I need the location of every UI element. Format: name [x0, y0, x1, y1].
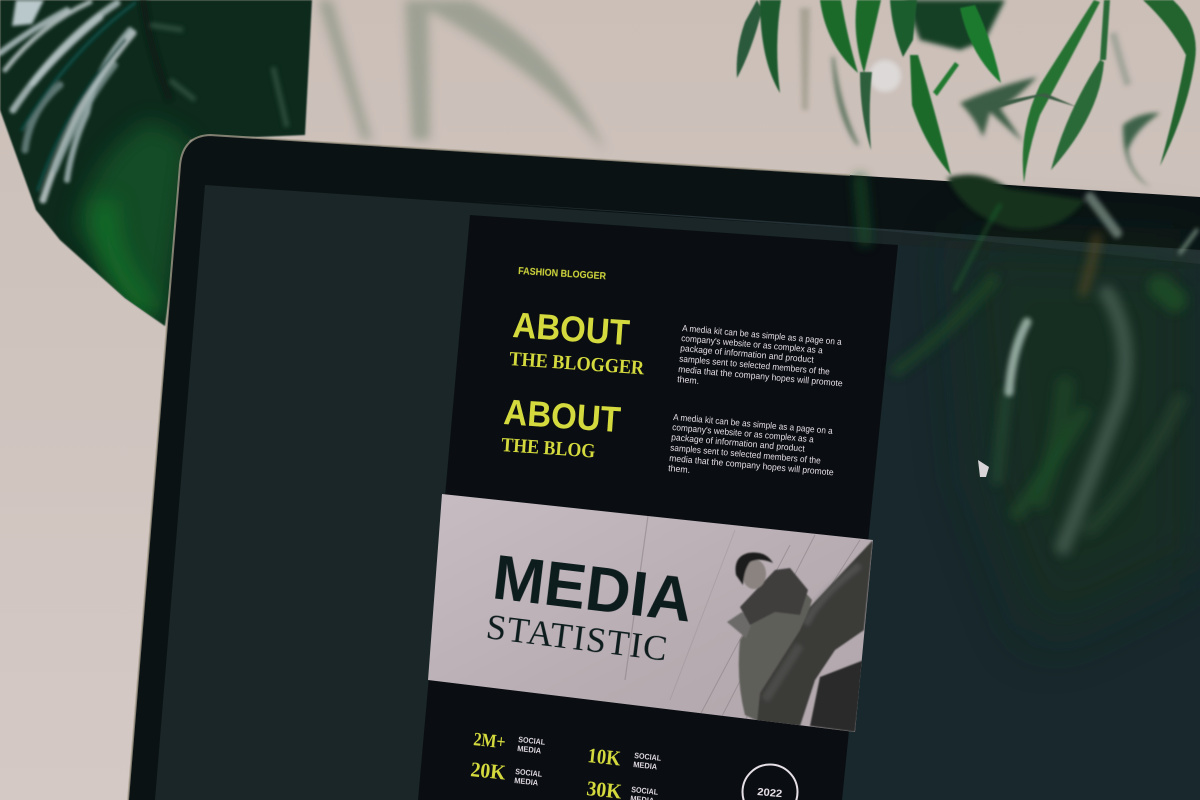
laptop screen	[155, 185, 1200, 800]
paragraph: about the blogger: A media kit can be as simple as a page on a	[682, 323, 842, 347]
stat: 30K: SOCIAL	[631, 785, 659, 797]
screen top band	[470, 201, 1200, 264]
dark green haze	[960, 240, 1200, 640]
paragraph: about the blog: company's website or as complex as a	[672, 422, 814, 444]
banner photo: media statistic	[428, 494, 873, 732]
paragraph: about the blog: media that the company hopes will promote	[669, 453, 834, 477]
laptop lid bezel	[128, 135, 1200, 800]
stat: 10K: SOCIAL	[634, 751, 662, 763]
paragraph: about the blog: samples sent to selected members of the	[670, 443, 821, 466]
stat: 20K: SOCIAL	[515, 767, 543, 779]
heading: about the blog: THE BLOG	[501, 434, 596, 463]
stat: 2M+	[472, 729, 546, 756]
stat: 20K	[469, 757, 543, 788]
headline: media: MEDIA	[489, 542, 696, 636]
stat: 10K	[586, 743, 662, 772]
stat: 10K: 10K	[586, 743, 622, 770]
heading: about the blog: ABOUT	[502, 391, 622, 440]
blurred background stems	[318, 0, 606, 152]
document page on screen	[418, 215, 898, 800]
stat: 2M+: SOCIAL	[518, 735, 546, 747]
stat: 30K	[585, 776, 659, 800]
head	[742, 559, 766, 589]
sleeve	[740, 568, 808, 625]
paragraph: about the blogger: company's website or as complex as a	[681, 333, 823, 355]
heading: about the blog	[501, 391, 622, 463]
hand	[727, 612, 752, 638]
soft mid frond leaves	[800, 0, 1160, 187]
leaf green glow	[75, 120, 190, 326]
paragraph: about the blogger: samples sent to selected members of the	[679, 354, 830, 377]
paragraph: about the blogger	[677, 323, 843, 388]
stat: 20K: MEDIA	[514, 776, 539, 788]
man kicking	[727, 540, 873, 732]
paragraph: about the blog: package of information and product	[671, 432, 806, 454]
paragraph: about the blogger: them.	[677, 374, 700, 386]
torso	[739, 590, 812, 722]
paragraph: about the blog	[668, 412, 834, 477]
heading: about the blogger	[509, 304, 645, 379]
heading: about the blogger: ABOUT	[511, 304, 631, 353]
paragraph: about the blog: A media kit can be as simple as a page on a	[673, 412, 833, 436]
leaf midrib and soft highlights	[143, 0, 170, 100]
paragraph: about the blogger: media that the company hopes will promote	[678, 364, 843, 388]
paragraph: about the blog: them.	[668, 463, 691, 475]
label: fashion blogger: FASHION BLOGGER	[518, 266, 607, 282]
subhead: statistic: STATISTIC	[484, 606, 670, 669]
leaf pale streaks	[0, 0, 135, 200]
stat: 2M+: MEDIA	[517, 744, 542, 756]
laptop body	[128, 135, 1200, 800]
heading: about the blogger: THE BLOGGER	[509, 348, 645, 379]
kicking leg	[757, 540, 873, 726]
hanging fronds upper right	[737, 0, 1196, 183]
stat: 2M+: 2M+	[472, 729, 506, 753]
stat: 20K: 20K	[469, 757, 507, 785]
large leaf upper left	[0, 0, 312, 326]
dark background corner	[810, 660, 864, 732]
year badge: 2022: 2022	[757, 786, 783, 800]
foreground blurred foliage over screen	[860, 175, 1200, 640]
paragraph: about the blogger: package of information and product	[680, 343, 815, 365]
year badge: 2022	[742, 764, 798, 800]
blurred stems	[860, 180, 1180, 547]
wood plank lines	[625, 516, 860, 720]
stat: 10K: MEDIA	[633, 760, 658, 772]
cursor	[978, 460, 989, 477]
